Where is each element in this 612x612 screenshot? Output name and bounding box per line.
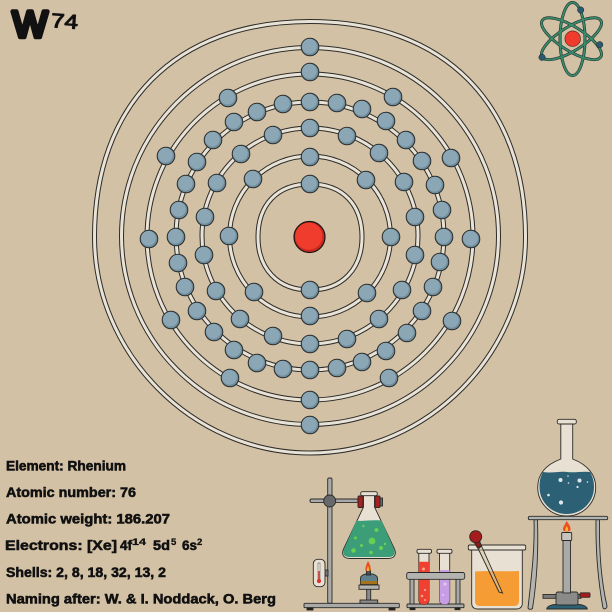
atomic number: Atomic number: 76 bbox=[6, 485, 137, 500]
orbit ring 3 bbox=[202, 128, 418, 344]
lab stand with conical flask bbox=[304, 478, 399, 610]
beaker with pipette bbox=[468, 531, 526, 609]
electrons shell 1 bbox=[301, 175, 319, 299]
purple test tube bbox=[437, 549, 452, 604]
naming: Naming after: W. & I. Noddack, O. Berg bbox=[6, 592, 276, 606]
round flask on tripod with bunsen burner bbox=[528, 419, 608, 609]
element facts text bbox=[5, 458, 276, 606]
orbit ring 6 bbox=[122, 48, 498, 424]
electrons shell 2 bbox=[220, 148, 400, 325]
electron configuration: 5 bbox=[171, 537, 177, 548]
orbit ring 7 outer bbox=[94, 22, 526, 453]
element symbol: 74 bbox=[50, 10, 79, 34]
electrons shell 3 bbox=[195, 119, 424, 353]
orbit ring 1 bbox=[258, 184, 362, 290]
thermometer bbox=[313, 559, 328, 587]
element symbol bbox=[12, 4, 79, 45]
electron configuration: 4f bbox=[120, 538, 132, 553]
red test tube bbox=[417, 549, 432, 604]
orange liquid bbox=[475, 571, 519, 606]
electron configuration bbox=[5, 537, 202, 553]
electron configuration: 5d bbox=[153, 538, 170, 553]
shells: Shells: 2, 8, 18, 32, 13, 2 bbox=[6, 565, 166, 580]
electrons shell 6 bbox=[301, 38, 319, 434]
round-bottom flask bbox=[538, 419, 596, 516]
orbit ring 5 bbox=[147, 74, 473, 400]
beaker body bbox=[472, 549, 522, 609]
element symbol: W bbox=[12, 4, 48, 45]
bunsen burner bbox=[543, 521, 590, 609]
stand pole and arm bbox=[310, 478, 358, 603]
beaker lip bbox=[468, 545, 526, 550]
orbit ring 4 bbox=[176, 102, 444, 370]
stand base bbox=[304, 603, 399, 610]
electrons shell 5 bbox=[140, 63, 480, 409]
atomic weight: Atomic weight: 186.207 bbox=[6, 512, 170, 526]
test tube rack bbox=[407, 549, 465, 610]
conical flask bbox=[343, 492, 395, 558]
rack base and uprights bbox=[407, 579, 464, 610]
rack top bar bbox=[407, 572, 465, 579]
pipette bbox=[470, 531, 502, 593]
icon: atom bbox=[536, 2, 607, 76]
electron configuration: 14 bbox=[132, 537, 147, 548]
atom diagram bbox=[94, 22, 526, 453]
orbit ring 2 bbox=[230, 156, 390, 317]
tripod bbox=[528, 516, 608, 609]
electron configuration: 2 bbox=[197, 537, 202, 548]
nucleus bbox=[294, 222, 325, 252]
element name: Element: Rhenium bbox=[6, 458, 126, 474]
electron configuration: 6s bbox=[182, 538, 197, 553]
spirit burner bbox=[359, 561, 379, 603]
electron configuration: Electrons: [Xe] bbox=[5, 538, 117, 553]
flask clamp bbox=[358, 496, 382, 508]
electrons shell 4 bbox=[167, 93, 453, 379]
